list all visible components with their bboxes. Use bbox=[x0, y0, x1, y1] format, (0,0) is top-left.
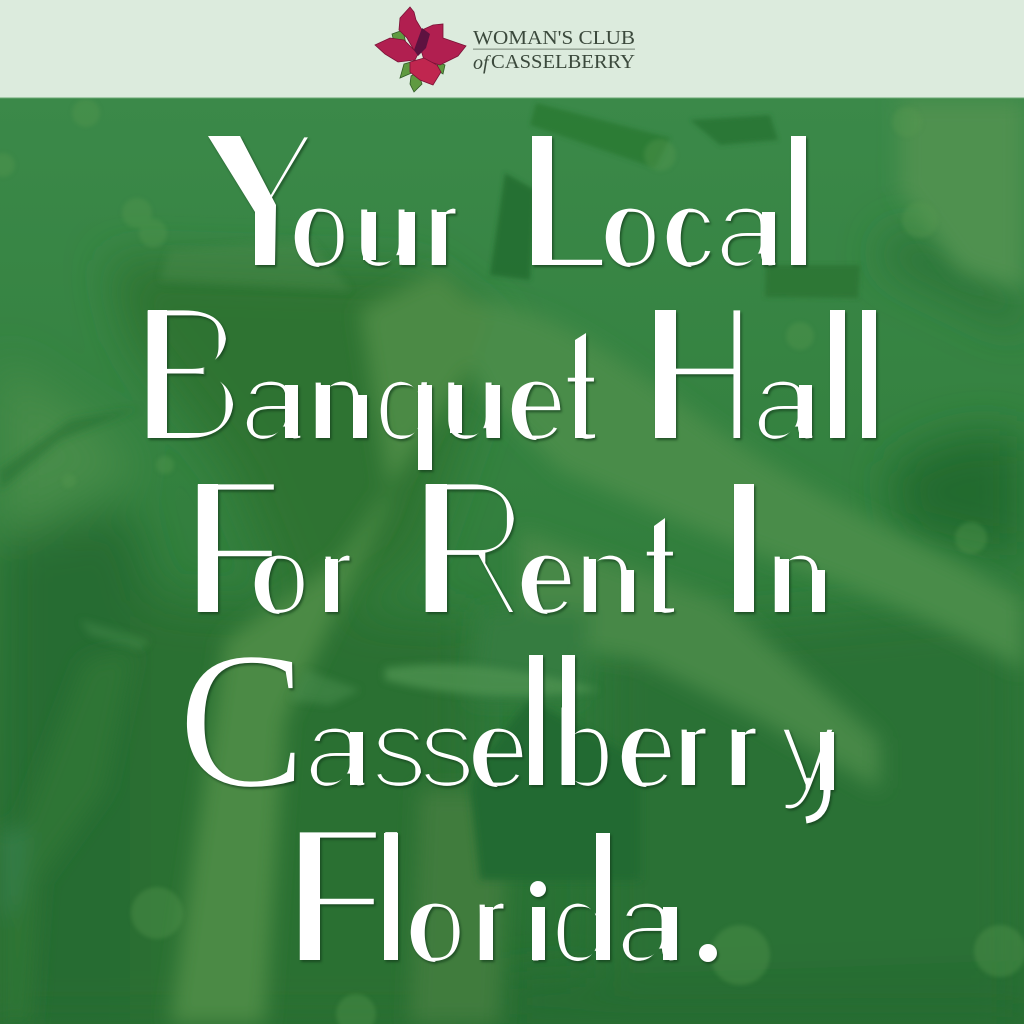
heading line 3: R bbox=[407, 436, 531, 660]
heading line 4: asse bbox=[304, 686, 529, 811]
confetti strips bbox=[490, 103, 860, 298]
heading line 4 bbox=[178, 611, 836, 828]
heading line 4: C bbox=[178, 611, 306, 828]
heading line 1: oca bbox=[599, 166, 778, 291]
heading line 1: L bbox=[514, 90, 612, 313]
heading line 3: n bbox=[765, 513, 827, 638]
heading line 3: F bbox=[179, 436, 285, 660]
heading line 3 bbox=[179, 436, 827, 660]
heading: Your Local Banquet Hall For Rent In Casselberry Florida. bbox=[128, 89, 889, 1008]
heading line 1: l bbox=[778, 102, 818, 306]
logo wordmark: WOMAN'S CLUB bbox=[473, 27, 635, 49]
heading line 5: da. bbox=[551, 861, 723, 986]
heading line 2: t bbox=[564, 330, 598, 466]
heading line 5: F bbox=[281, 784, 387, 1008]
logo band bbox=[0, 0, 1024, 98]
heading line 2: anque bbox=[240, 339, 567, 464]
heading line 2: a bbox=[752, 339, 815, 464]
heading line 4: l bbox=[516, 622, 556, 826]
heading line 2: H bbox=[637, 263, 758, 486]
heading line 4: berry bbox=[552, 686, 836, 811]
heading line 5: i bbox=[524, 867, 548, 985]
heading line 2: ll bbox=[817, 275, 889, 479]
heading line 2 bbox=[128, 263, 889, 486]
heading line 3: en bbox=[515, 513, 636, 638]
heading line 3: I bbox=[716, 437, 772, 660]
logo wordmark bbox=[473, 27, 635, 74]
heading line 5: l bbox=[371, 797, 411, 1001]
heading line 1: Y bbox=[201, 89, 322, 313]
heading line 1 bbox=[201, 89, 818, 313]
heading line 5: or bbox=[404, 861, 507, 986]
logo wordmark: CASSELBERRY bbox=[491, 51, 635, 73]
icon: hibiscus flower bbox=[375, 7, 466, 92]
heading line 3: or bbox=[248, 513, 353, 638]
heading line 2: B bbox=[128, 263, 247, 486]
heading line 5 bbox=[281, 784, 723, 1008]
heading line 1: our bbox=[288, 166, 459, 291]
heading line 3: t bbox=[643, 504, 677, 640]
logo wordmark: of bbox=[473, 52, 491, 74]
